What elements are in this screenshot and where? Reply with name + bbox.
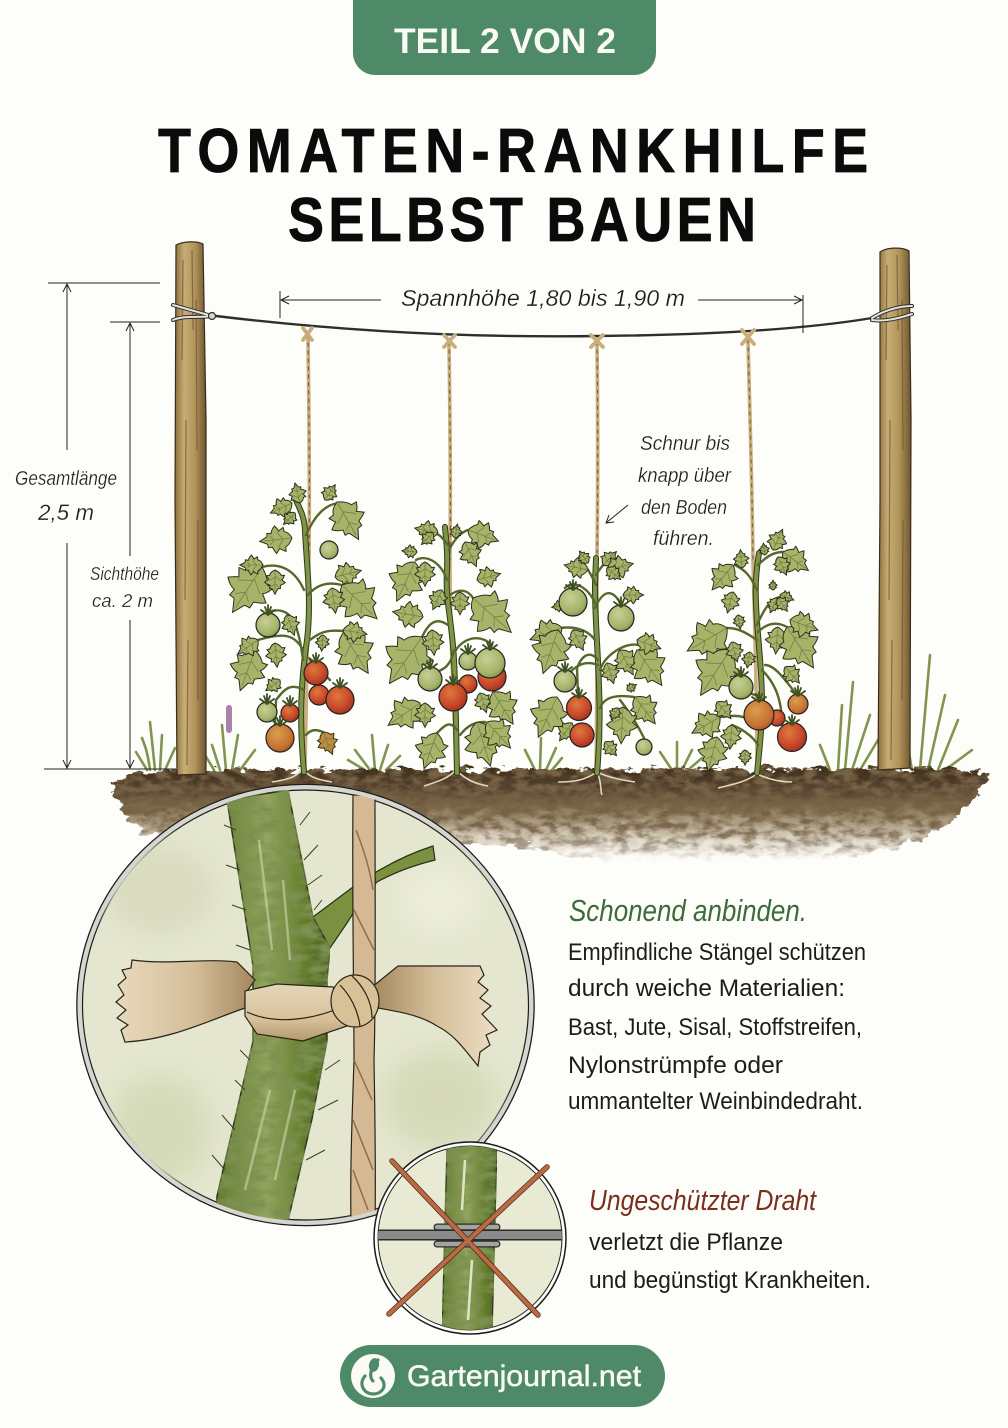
tomato plant 3 [521,546,677,773]
text block: soft tying: Schonend anbinden. [569,893,807,928]
text block: soft tying: Empfindliche Stängel schützen [568,939,866,966]
tomato stem [212,790,435,1225]
cross [389,1161,547,1315]
text block: soft tying: durch weiche Materialien: [568,975,845,1002]
grass tufts [136,655,972,770]
total length label [15,468,117,525]
stems [560,558,644,773]
string note: knapp über [638,465,732,487]
twine strings [303,328,757,772]
tomatoes [554,580,652,755]
text block: unprotected wire: Ungeschützter Draht [589,1185,818,1217]
total length label: Gesamtlänge [15,468,117,490]
footer logo pill: Gartenjournal.net [407,1360,642,1393]
icon: sprout logo [351,1354,395,1398]
tomatoes [418,640,506,711]
left post [175,242,206,775]
tension wire [173,305,912,336]
stem [442,1145,497,1335]
dimension lines [44,283,803,769]
fabric tie [116,960,497,1066]
visible height label: ca. 2 m [92,591,153,611]
string note: führen. [653,528,714,550]
tomatoes [256,541,354,752]
title: SELBST BAUEN [288,185,756,255]
text block: unprotected wire: und begünstigt Krankheiten. [589,1267,871,1294]
text block: soft tying: ummantelter Weinbindedraht. [568,1088,863,1115]
tomato plant 2 [370,517,527,774]
string note: Schnur bis [640,433,730,455]
string note: den Boden [641,497,727,519]
header tab: TEIL 2 VON 2 [394,22,616,61]
string note [638,433,732,550]
text block: unprotected wire: verletzt die Pflanze [589,1229,783,1256]
detail circle: soft tie [77,784,534,1226]
tomatoes [729,667,808,752]
header tab [353,0,656,75]
title: TOMATEN-RANKHILFE [158,116,868,186]
footer logo pill [340,1345,665,1407]
leaves [677,525,831,775]
text block: soft tying [568,893,866,1115]
soil bed [112,768,990,864]
visible height label: Sichthöhe [90,564,159,584]
total length label: 2,5 m [37,500,94,525]
tomato plant 4 [677,525,831,775]
visible height label [90,564,159,611]
leaves [213,480,391,758]
tomato plant 1 [213,480,391,772]
roots [272,770,792,795]
stems [258,500,343,772]
text block: soft tying: Bast, Jute, Sisal, Stoffstreifen, [568,1014,862,1041]
text block: unprotected wire [589,1185,871,1294]
detail circle: unprotected wire [374,1142,566,1335]
wire [374,1230,566,1240]
leaves [370,517,527,774]
title [158,116,868,255]
rope [351,795,375,1225]
spanning height label: Spannhöhe 1,80 bis 1,90 m [401,285,685,311]
right post [878,248,911,770]
stems [416,527,492,773]
leaves [521,546,677,761]
text block: soft tying: Nylonstrümpfe oder [568,1052,783,1079]
stems [720,552,797,773]
